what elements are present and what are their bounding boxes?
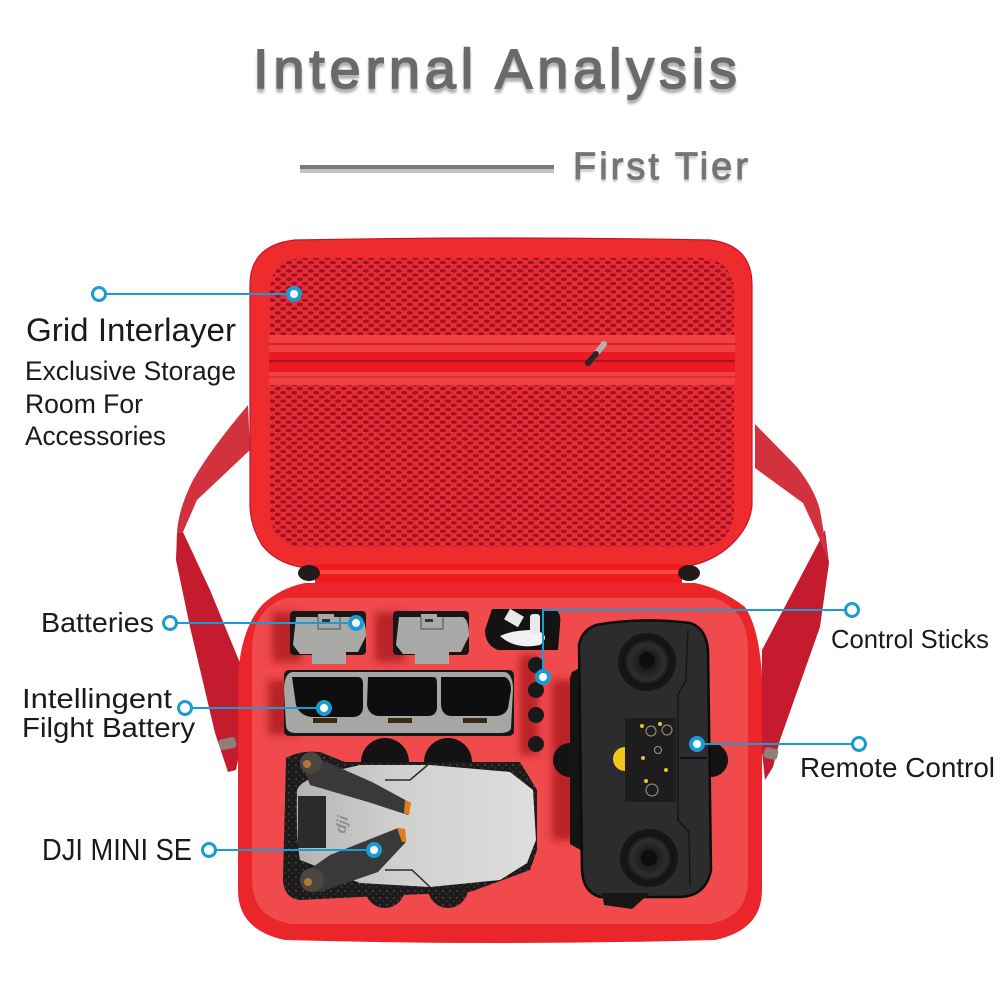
charging hub tray [284, 670, 514, 736]
title: Internal Analysis [253, 37, 737, 100]
label: grid interlayer [25, 312, 236, 451]
label: grid interlayer: Accessories [25, 421, 166, 451]
remote body [579, 620, 711, 897]
callout: control sticks [537, 604, 858, 683]
lid lower mesh pocket [270, 385, 734, 547]
drone foam cavity [283, 738, 537, 908]
label: control sticks: Control Sticks [831, 624, 989, 654]
propeller: lower [300, 828, 406, 892]
drone logo: dji [332, 814, 352, 835]
subtitle with rule: First Tier [573, 146, 748, 188]
label: drone: DJI MINI SE [42, 832, 192, 867]
lid zipper band [269, 335, 735, 385]
drone camera window [298, 796, 326, 848]
battery 2 [393, 611, 469, 664]
label: flight battery [22, 683, 195, 743]
zipper pull [588, 344, 604, 363]
label: batteries: Batteries [41, 607, 154, 638]
cable pocket [485, 609, 560, 650]
label: remote control: Remote Control [800, 752, 995, 783]
callout: remote control [691, 738, 866, 750]
shoulder strap: right [755, 424, 829, 780]
lid upper mesh pocket [270, 258, 734, 335]
stick: upper [618, 633, 676, 691]
battery 1 [290, 611, 366, 664]
foam shadows [268, 612, 580, 840]
remote control [570, 620, 711, 909]
label: grid interlayer: Room For [25, 389, 143, 419]
case lid [250, 238, 752, 567]
subtitle with rule: First Tier [573, 149, 748, 191]
label: grid interlayer: Grid Interlayer [26, 312, 236, 348]
remote foot [602, 893, 650, 909]
base foam [252, 598, 748, 924]
remote side clip [570, 666, 584, 852]
remote instruction label [625, 718, 676, 802]
drone [297, 752, 536, 892]
title: Internal Analysis [253, 41, 737, 104]
spare control sticks [528, 657, 544, 752]
callout: grid interlayer [92, 288, 300, 300]
callout: flight battery [178, 702, 330, 714]
drone body seams [385, 763, 430, 887]
remote foam notches [553, 743, 728, 777]
label: flight battery: Intellingent [22, 683, 172, 714]
yellow sticker [613, 747, 625, 771]
shoulder strap: left [176, 405, 250, 772]
lid shell [250, 238, 752, 567]
callout: drone [202, 844, 380, 856]
stick: lower [620, 829, 678, 887]
propeller: upper [300, 752, 411, 815]
hinge band and clips [298, 564, 700, 586]
case base [238, 583, 762, 943]
label: grid interlayer: Exclusive Storage [25, 356, 236, 386]
subtitle with rule [300, 146, 748, 191]
drone body [297, 765, 536, 887]
base shell [238, 583, 762, 943]
label: flight battery: Filght Battery [22, 712, 195, 743]
callout: batteries [164, 616, 362, 630]
